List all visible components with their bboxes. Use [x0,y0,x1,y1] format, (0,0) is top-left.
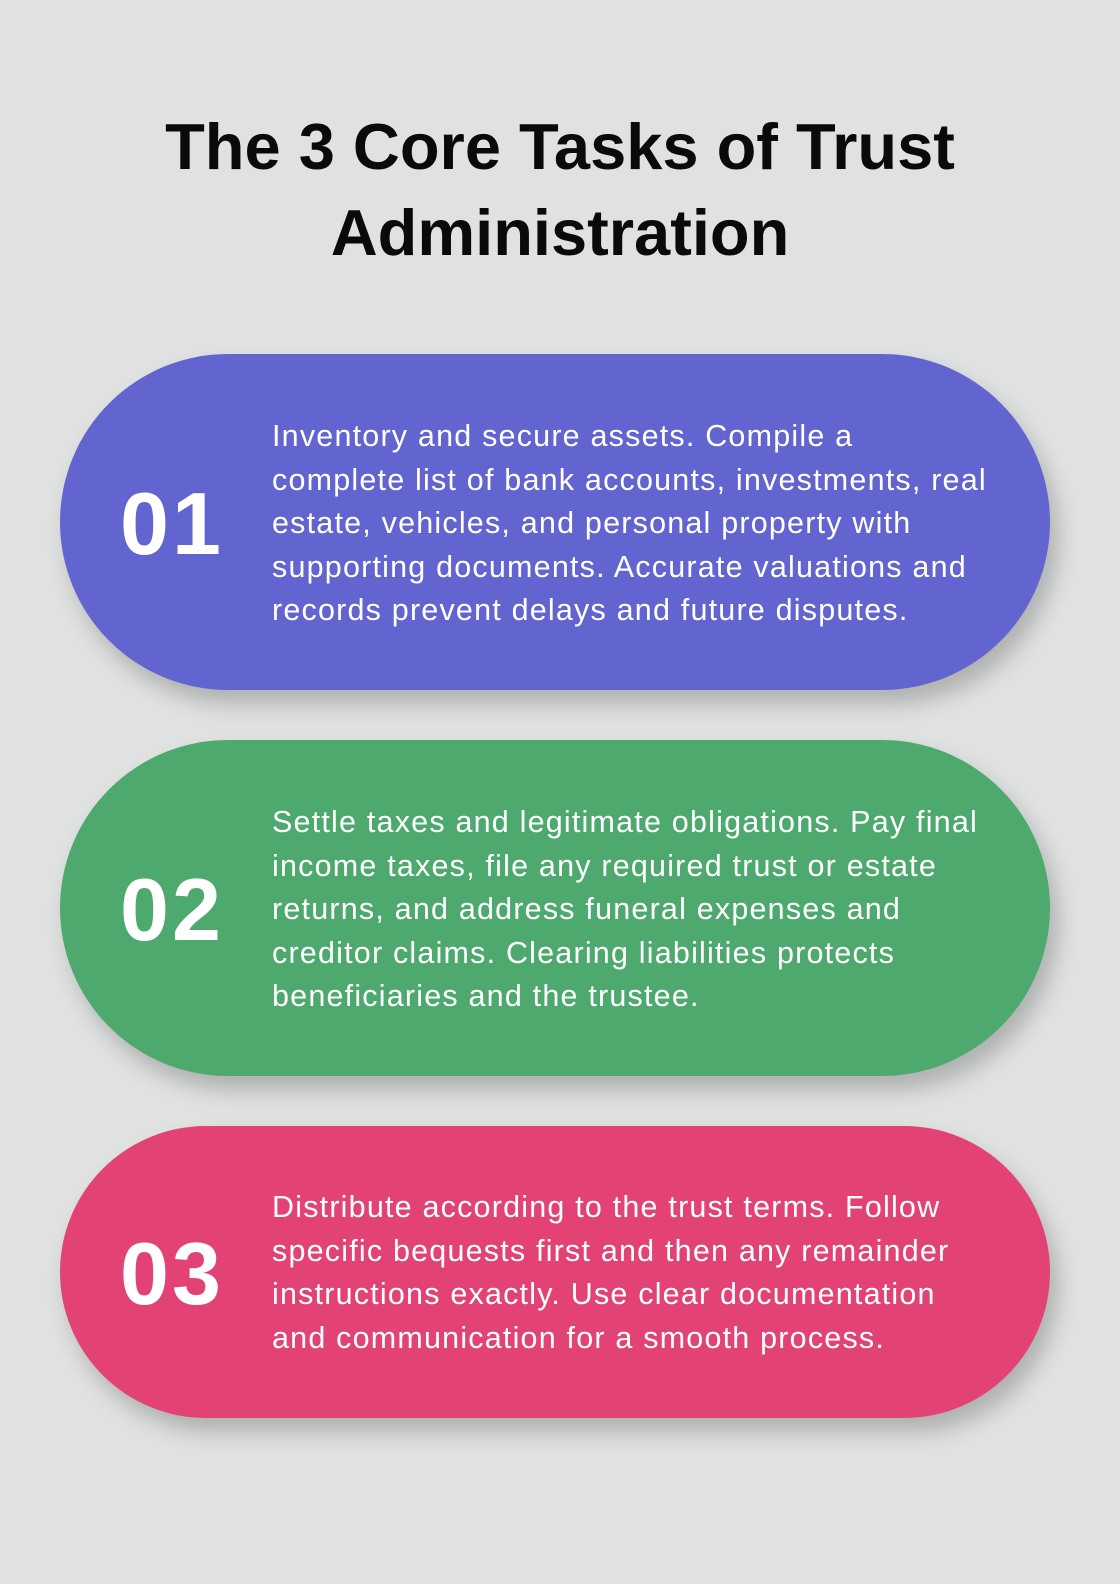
text 03: Distribute according to the trust terms. Follow [272,1190,940,1224]
text 03: and communication for a smooth process. [272,1320,885,1354]
title: Administration [331,196,789,269]
text 01: estate, vehicles, and personal property with [272,506,911,540]
title: The 3 Core Tasks of Trust [165,110,955,183]
text 02: Settle taxes and legitimate obligations. Pay final [272,805,978,839]
text 02: beneficiaries and the trustee. [272,979,700,1013]
panel: task 01 [60,354,1050,690]
text 01: Inventory and secure assets. Compile a [272,419,853,453]
text 03: instructions exactly. Use clear documentation [272,1277,936,1311]
text 03 [272,1190,949,1354]
text 01: complete list of bank accounts, investments, real [272,462,987,496]
text 01: supporting documents. Accurate valuations and [272,550,967,584]
number 02: 02 [120,860,224,959]
text 03: specific bequests first and then any remainder [272,1234,949,1268]
text 01 [272,419,987,627]
text 02: income taxes, file any required trust or estate [272,848,937,882]
text 02: returns, and address funeral expenses and [272,892,901,926]
number 01: 01 [120,474,224,573]
text 02: creditor claims. Clearing liabilities protects [272,936,895,970]
text 01: records prevent delays and future disputes. [272,593,909,627]
number 03: 03 [120,1224,224,1323]
panel: task 02 [60,740,1050,1076]
panel: task 03 [60,1126,1050,1418]
title [165,110,955,269]
text 02 [272,805,978,1013]
